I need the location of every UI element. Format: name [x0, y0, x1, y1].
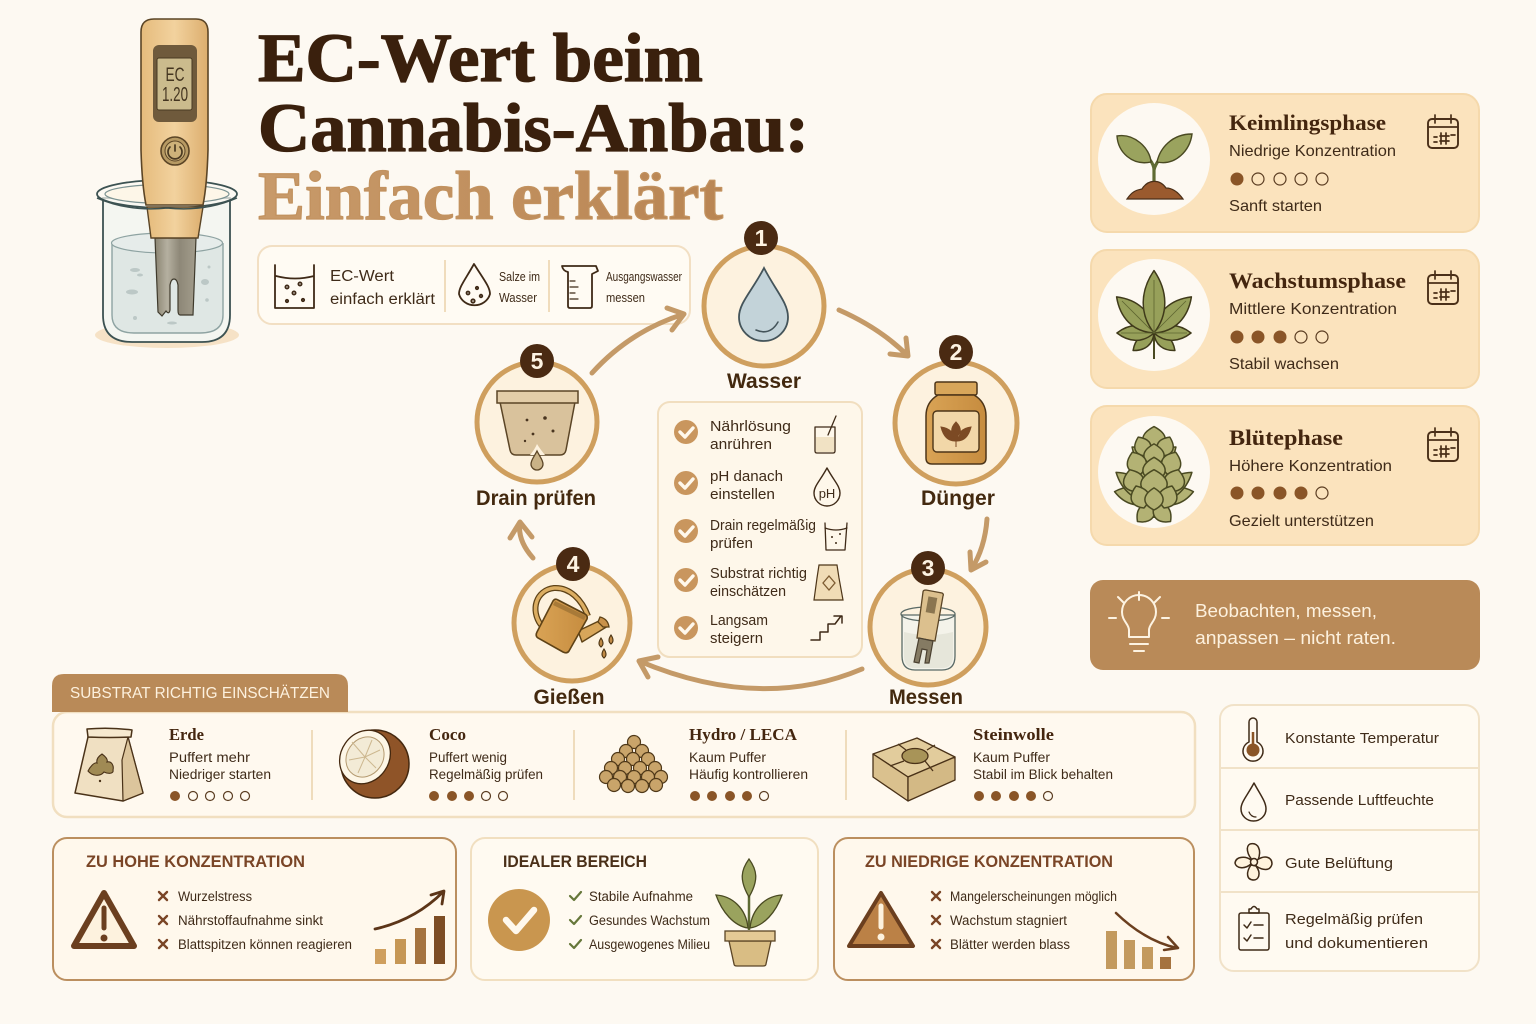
list — [570, 889, 710, 952]
icon: beaker with particles — [275, 265, 314, 308]
icon: watering can — [535, 588, 613, 658]
badge 1: 1 — [755, 225, 768, 251]
icon: check badge — [488, 889, 550, 951]
text: Stabil wachsen — [1229, 356, 1339, 373]
title: Einfach erklärt — [258, 158, 723, 234]
text: Höhere Konzentration — [1229, 458, 1392, 475]
item: Steinwolle: Steinwolle — [973, 725, 1054, 744]
icon: cannabis leaf — [1110, 271, 1198, 359]
badge 3 — [911, 551, 945, 585]
item: Hydro / LECA: Hydro / LECA — [689, 725, 798, 744]
arrow: step 3 to 4 — [639, 657, 862, 689]
badge 2 — [939, 335, 973, 369]
item: Erde: Niedriger starten — [169, 767, 271, 782]
list: Nährstoffaufnahme sinkt — [178, 913, 323, 928]
text: Niedrige Konzentration — [1229, 143, 1396, 160]
panel: Wachstumsphase — [1091, 250, 1479, 388]
label: Wasser — [727, 370, 801, 393]
arrow: step 1 to 2 — [839, 310, 908, 356]
step 2: Dünger — [895, 335, 1017, 510]
badge 5: 5 — [531, 348, 544, 374]
item: pH danach einstellen: pH — [819, 486, 835, 501]
item: Steinwolle — [873, 725, 1113, 801]
list: Ausgewogenes Milieu — [589, 937, 710, 952]
item: Nährlösung anrühren: Nährlösung — [710, 418, 791, 435]
item: documentation — [1239, 906, 1428, 952]
panel: Idealer Bereich — [471, 838, 818, 980]
list: Blattspitzen können reagieren — [178, 937, 352, 952]
badge 3: 3 — [922, 555, 934, 581]
step 5: Drain prüfen — [476, 344, 597, 510]
icon: warning — [849, 893, 913, 946]
panel: Substrat richtig einschätzen — [52, 674, 1195, 817]
icon: flower bud — [1111, 427, 1197, 527]
item: documentation: und dokumentieren — [1285, 935, 1428, 952]
item: Coco: Regelmäßig prüfen — [429, 767, 543, 782]
text: anpassen – nicht raten. — [1195, 628, 1396, 648]
heading: IDEALER BEREICH — [503, 852, 647, 871]
text: Mittlere Konzentration — [1229, 301, 1397, 318]
icon: light bulb — [1109, 592, 1169, 651]
list — [932, 889, 1117, 952]
item: pH danach einstellen: pH danach — [710, 468, 783, 485]
icon: seedling — [1117, 134, 1192, 199]
icon: measuring beaker — [562, 266, 598, 308]
item: Hydro / LECA: Häufig kontrollieren — [689, 767, 808, 782]
icon: EC meter in beaker: EC — [166, 65, 184, 86]
list: Stabile Aufnahme — [589, 889, 693, 904]
level dots — [1230, 330, 1328, 344]
badge 2: 2 — [950, 339, 962, 365]
item: Steinwolle: Kaum Puffer — [973, 750, 1051, 765]
text: Beobachten, messen, — [1195, 601, 1377, 621]
text: Ausgangswasser messen: messen — [606, 291, 645, 305]
list: Gesundes Wachstum — [589, 913, 710, 928]
item: pH danach einstellen — [674, 468, 840, 506]
item: Substrat richtig einschätzen: einschätzen — [710, 583, 786, 600]
icon: rockwool cube — [873, 738, 955, 801]
text: EC-Wert: EC-Wert — [330, 268, 395, 285]
icon: EC meter in beaker — [95, 19, 239, 348]
panel: Zu hohe Konzentration — [53, 838, 456, 980]
level dots — [1230, 172, 1328, 186]
panel: environment checklist — [1220, 705, 1479, 971]
item: Substrat richtig einschätzen: Substrat richtig — [710, 565, 807, 582]
heading: Keimlingsphase — [1229, 110, 1386, 135]
icon: warning — [74, 893, 134, 946]
heading: ZU NIEDRIGE KONZENTRATION — [865, 852, 1113, 871]
icon: soil bag — [75, 728, 143, 801]
panel: Zu niedrige Konzentration — [834, 838, 1194, 980]
item: Drain regelmäßig prüfen: Drain regelmäßig — [710, 517, 816, 534]
badge 4: 4 — [567, 551, 580, 577]
text: Ausgangswasser messen: Ausgangswasser — [606, 270, 682, 284]
level dots — [1230, 486, 1328, 500]
icon: calendar — [1428, 115, 1458, 148]
heading: Wachstumsphase — [1229, 268, 1406, 293]
chart: falling bars — [1106, 913, 1178, 969]
icon: water drop — [739, 268, 788, 341]
text — [1195, 601, 1396, 648]
item: humidity — [1241, 783, 1434, 821]
label: Messen — [889, 686, 963, 709]
heading tab: SUBSTRAT RICHTIG EINSCHÄTZEN — [70, 685, 330, 702]
text: Ausgangswasser messen — [606, 270, 682, 305]
heading: Blütephase — [1229, 425, 1343, 450]
icon: calendar — [1428, 428, 1458, 461]
icon: calendar — [1428, 271, 1458, 304]
step 4: Gießen — [514, 547, 630, 709]
heading: ZU HOHE KONZENTRATION — [86, 852, 305, 871]
item: Coco: Coco — [429, 725, 466, 744]
panel: checklist — [658, 402, 862, 657]
label: Drain prüfen — [476, 487, 596, 510]
item: ventilation: Gute Belüftung — [1285, 855, 1393, 872]
list: Mangelerscheinungen möglich — [950, 889, 1117, 904]
item: Hydro / LECA: Kaum Puffer — [689, 750, 767, 765]
chart: rising bars — [375, 891, 445, 964]
item: ventilation — [1235, 844, 1393, 880]
list: Wachstum stagniert — [950, 913, 1067, 928]
item: Steinwolle: Stabil im Blick behalten — [973, 767, 1113, 782]
icon: meter in beaker — [901, 590, 955, 670]
panel: Blütephase — [1091, 406, 1479, 545]
item: Langsam steigern: Langsam — [710, 612, 768, 629]
arrow: step 2 to 3 — [970, 519, 987, 570]
step 1: Wasser — [704, 221, 824, 393]
text: Salze im Wasser: Wasser — [499, 291, 537, 305]
item: Coco — [329, 720, 543, 801]
text: Sanft starten — [1229, 198, 1322, 215]
item: Erde — [75, 725, 271, 801]
item: Drain regelmäßig prüfen: prüfen — [710, 535, 753, 552]
icon: clay pebbles — [600, 736, 668, 792]
item: Drain regelmäßig prüfen — [674, 517, 847, 552]
item: Erde: Puffert mehr — [169, 750, 251, 765]
item: pH danach einstellen: einstellen — [710, 486, 775, 503]
callout: tip — [1090, 580, 1480, 670]
item: Langsam steigern — [674, 612, 842, 647]
icon: pot with drain — [497, 391, 578, 470]
text: EC-Wert: einfach erklärt — [330, 291, 436, 308]
icon: EC meter in beaker: 1.20 — [162, 84, 188, 106]
item: Langsam steigern: steigern — [710, 630, 763, 647]
text: EC-Wert — [330, 268, 436, 308]
item: Substrat richtig einschätzen — [674, 565, 843, 600]
label: Dünger — [921, 487, 995, 510]
list — [159, 889, 352, 952]
item: documentation: Regelmäßig prüfen — [1285, 911, 1423, 928]
list: Wurzelstress — [178, 889, 252, 904]
panel: Keimlingsphase — [1091, 94, 1479, 232]
arrow: step 5 to 1 — [592, 308, 684, 373]
item: Coco: Puffert wenig — [429, 750, 507, 765]
heading tab — [52, 674, 348, 712]
item: Hydro / LECA — [600, 725, 808, 801]
icon: drop with salts — [459, 264, 490, 305]
item: Erde: Erde — [169, 725, 204, 744]
item: Nährlösung anrühren — [674, 416, 836, 453]
title: EC-Wert beim — [258, 20, 703, 96]
item: temperature — [1243, 718, 1439, 761]
badge 1 — [744, 221, 778, 255]
badge 5 — [520, 344, 554, 378]
icon: coconut — [329, 720, 409, 798]
title — [258, 20, 809, 234]
text: Gezielt unterstützen — [1229, 513, 1374, 530]
arrow: step 4 to 5 — [510, 522, 533, 558]
item: Nährlösung anrühren: anrühren — [710, 436, 772, 453]
list: Blätter werden blass — [950, 937, 1070, 952]
icon: fertilizer jar — [926, 382, 986, 464]
badge 4 — [556, 547, 590, 581]
title: Cannabis-Anbau: — [258, 90, 809, 166]
item: temperature: Konstante Temperatur — [1285, 730, 1439, 747]
item: humidity: Passende Luftfeuchte — [1285, 792, 1434, 809]
step 3: Messen — [870, 551, 986, 709]
panel: info strip — [258, 246, 690, 324]
text: Salze im Wasser: Salze im — [499, 270, 540, 284]
icon: potted plant — [716, 859, 782, 966]
label: Gießen — [534, 686, 604, 709]
text: Salze im Wasser — [499, 270, 540, 305]
